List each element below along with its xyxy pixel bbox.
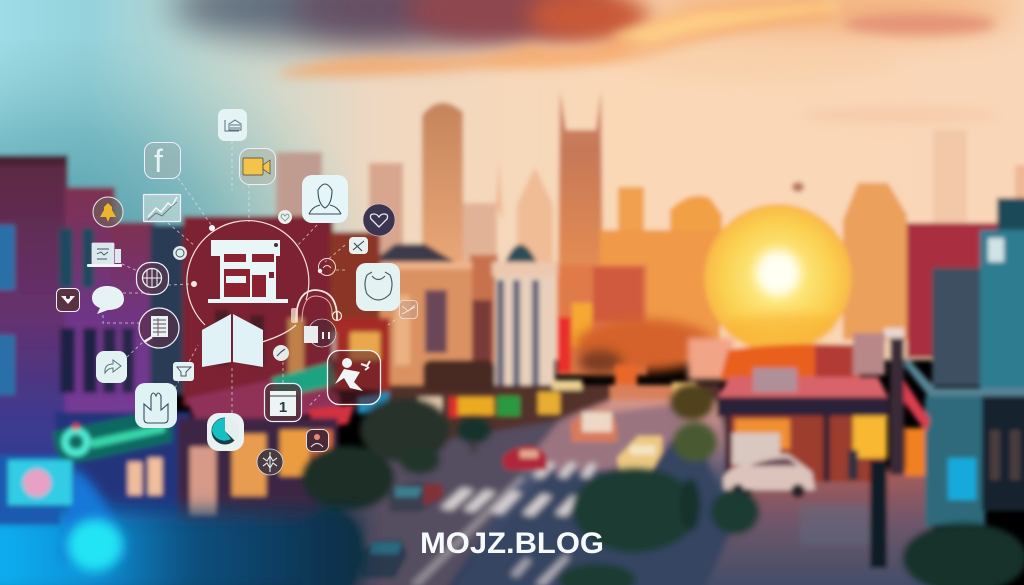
icon: speech bubble [92, 286, 124, 314]
icon: square shield [356, 263, 400, 311]
distant skyline [276, 90, 1024, 350]
icon: eye shield [56, 288, 80, 312]
street cars [360, 410, 662, 578]
classical building with dark roof [372, 244, 472, 392]
neon sign [52, 408, 172, 466]
icon: mail [400, 300, 418, 318]
icon: calendar: 1 [279, 399, 287, 416]
crosswalk stripes [410, 462, 597, 585]
icon: small person [306, 430, 328, 452]
icon: small target [173, 246, 187, 260]
icon: headset [291, 290, 342, 347]
icon: video camera [240, 148, 276, 184]
icon: facebook [144, 142, 180, 179]
foreground neon blue glow [0, 455, 360, 585]
street and ground [300, 338, 940, 585]
icon cluster [56, 109, 418, 475]
white car [723, 454, 815, 498]
icon: globe [136, 262, 168, 294]
icon: newspaper [139, 308, 179, 348]
sky background [0, 0, 1024, 360]
icon: running figure [328, 350, 380, 404]
street trees [296, 384, 1024, 585]
left buildings [0, 155, 390, 540]
icon: storefront [208, 240, 288, 303]
icon: open book [202, 314, 263, 367]
icon: small ring [318, 258, 336, 276]
icon: brain [257, 449, 283, 475]
watermark title: MOJZ.BLOG [420, 527, 604, 560]
icon: heart badge [363, 204, 395, 236]
icon: small clock [273, 345, 289, 361]
icon: calendar [264, 384, 302, 422]
icon: hand gesture [135, 383, 177, 428]
lower storefronts [55, 362, 390, 533]
icon: document top [218, 109, 247, 141]
icon: facebook: f [154, 143, 163, 179]
icon: small arrows [349, 237, 368, 254]
domed tower [492, 244, 558, 415]
mid-distance orange buildings [470, 255, 715, 385]
sun [704, 204, 852, 352]
right buildings [884, 198, 1024, 526]
connector lines [103, 141, 395, 415]
icon: person portrait [302, 175, 348, 223]
icon: small heart [278, 210, 292, 224]
sunset clouds [170, 0, 1020, 123]
lower street band [380, 360, 720, 445]
central hub ring [187, 221, 309, 342]
gas station canopy [717, 333, 889, 498]
icon: yellow badge [93, 197, 123, 227]
street pole [870, 460, 887, 568]
icon: growth chart [144, 194, 180, 222]
icon: anvil [173, 362, 194, 381]
icon: share arrow [96, 351, 127, 383]
icon: pie chart [207, 413, 244, 451]
icon: laptop [87, 243, 122, 267]
